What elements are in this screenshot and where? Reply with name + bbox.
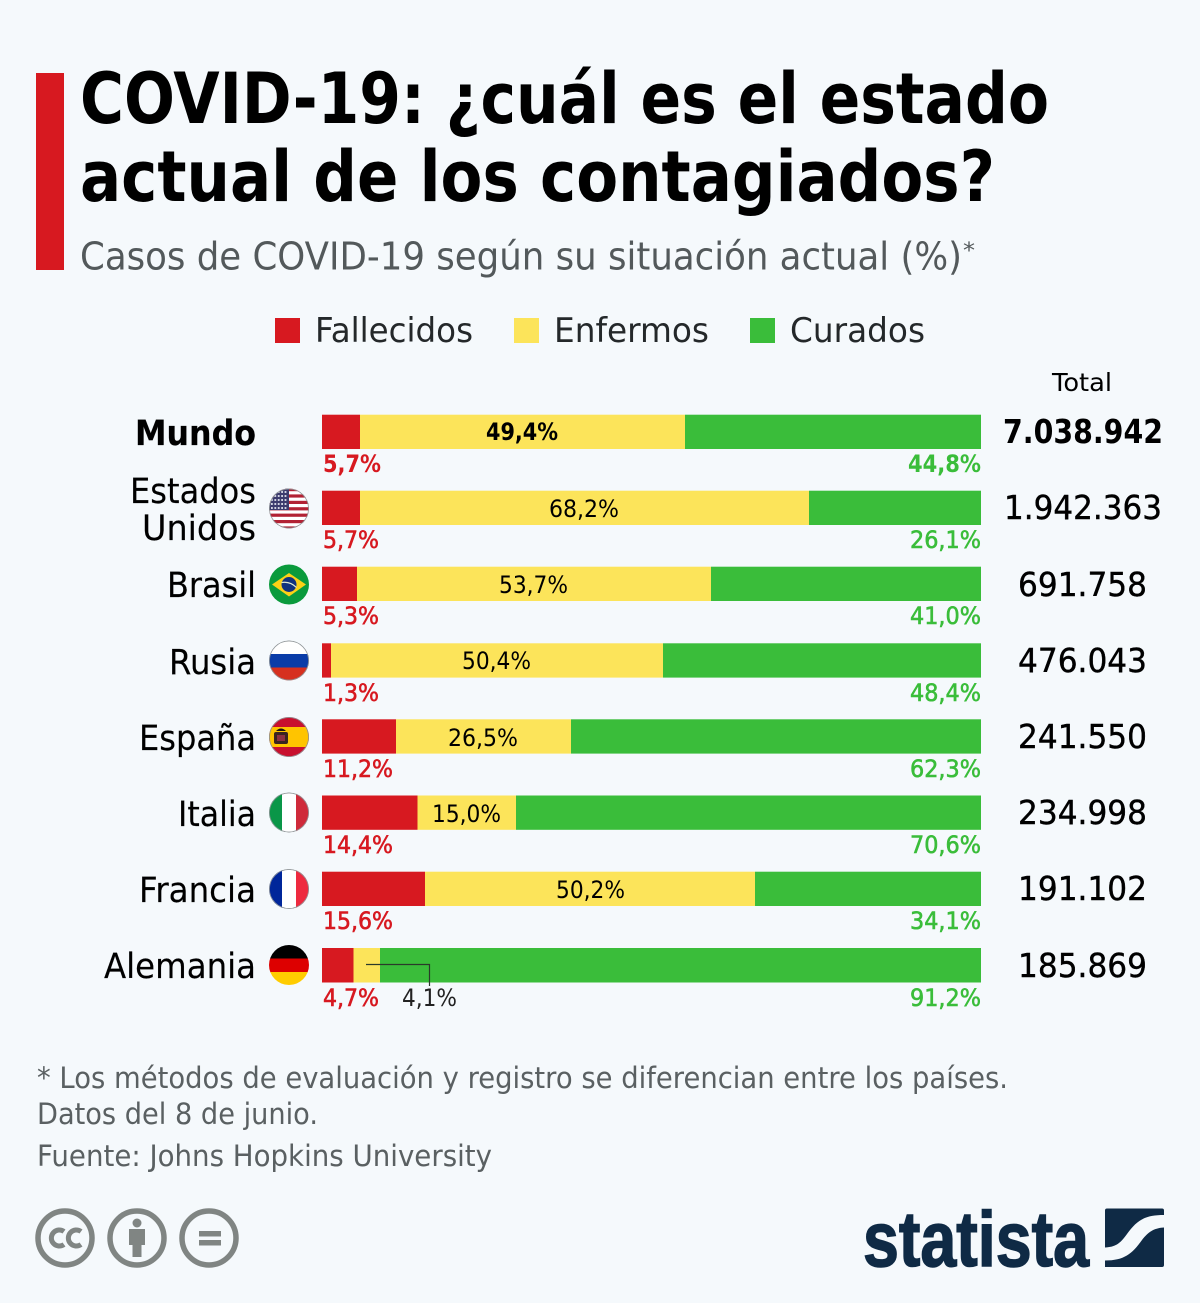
subtitle: *	[963, 239, 975, 264]
row: Brasil: 41,0%	[910, 602, 981, 630]
row: Alemania: 4,7%	[323, 984, 379, 1012]
row: Italia: 14,4%	[323, 831, 393, 859]
row: Estados Unidos: 1.942.363	[1004, 488, 1162, 527]
row: Italia: 15,0%	[432, 800, 501, 828]
row: Francia: 15,6%	[323, 907, 393, 935]
row: Estados Unidos: Estados	[130, 472, 256, 512]
leader line	[366, 964, 430, 986]
title: COVID-19: ¿cuál es el estado	[80, 58, 1049, 140]
row: Rusia: Rusia	[169, 643, 256, 683]
row: Italia: Italia	[178, 795, 256, 835]
icon: Italy flag	[269, 792, 310, 833]
row: España: 11,2%	[323, 755, 393, 783]
icon: Spain flag	[269, 716, 309, 758]
legend: Fallecidos	[315, 311, 473, 350]
row: Brasil: 5,3%	[323, 602, 379, 630]
row: Mundo	[135, 412, 1163, 478]
row: España: 26,5%	[448, 724, 518, 752]
row: Brasil: 53,7%	[499, 571, 568, 599]
row: Alemania: Alemania	[104, 947, 256, 987]
row: Alemania: 91,2%	[910, 984, 981, 1012]
row: Italia	[178, 792, 1147, 859]
row: España: España	[139, 719, 256, 759]
row: Brasil	[167, 564, 1147, 630]
footnote	[37, 1061, 1008, 1173]
icon: Germany flag	[269, 945, 309, 986]
title	[80, 58, 1049, 218]
row: Estados Unidos: Unidos	[142, 509, 256, 549]
row: Rusia	[169, 640, 1147, 707]
legend	[275, 311, 925, 350]
row: España: 62,3%	[910, 755, 981, 783]
icon: creative commons licence	[38, 1211, 236, 1265]
row: Alemania	[104, 945, 1147, 1012]
row: Mundo: 49,4%	[486, 418, 558, 446]
row: Rusia: 50,4%	[462, 647, 531, 675]
footnote: Datos del 8 de junio.	[37, 1097, 318, 1131]
footnote: Fuente: Johns Hopkins University	[37, 1139, 492, 1173]
legend: Enfermos	[554, 311, 709, 350]
row: Rusia: 48,4%	[910, 679, 981, 707]
row: Alemania: 4,1%	[402, 984, 457, 1012]
row: Alemania: 185.869	[1018, 946, 1147, 985]
row: Francia: 50,2%	[556, 876, 625, 904]
row: Mundo: 7.038.942	[1003, 412, 1163, 451]
row: Rusia: 476.043	[1018, 641, 1147, 680]
row: España: 241.550	[1018, 717, 1147, 756]
subtitle: Casos de COVID-19 según su situación actual (%)	[80, 234, 962, 280]
row: Francia	[139, 868, 1147, 935]
icon: US flag	[269, 488, 309, 530]
row: Estados Unidos: 68,2%	[549, 495, 619, 523]
total column heading: Total	[1051, 368, 1112, 397]
footnote: * Los métodos de evaluación y registro se diferencian entre los países.	[37, 1061, 1008, 1095]
title: actual de los contagiados?	[80, 136, 995, 218]
row: Estados Unidos: 26,1%	[910, 526, 981, 554]
row: Estados Unidos: 5,7%	[323, 526, 379, 554]
icon: France flag	[269, 868, 310, 910]
row: Mundo: 5,7%	[323, 450, 381, 478]
title accent bar	[36, 73, 64, 270]
row: Francia: 191.102	[1018, 869, 1147, 908]
row: Brasil: Brasil	[167, 566, 256, 606]
row: Mundo: Mundo	[135, 414, 256, 454]
row: Francia: Francia	[139, 871, 256, 911]
row: Italia: 234.998	[1018, 793, 1147, 832]
statista logo: statista	[863, 1195, 1090, 1283]
row: Estados Unidos	[130, 472, 1162, 554]
row: Rusia: 1,3%	[323, 679, 379, 707]
icon: Brazil flag	[269, 564, 309, 605]
row: España	[139, 716, 1147, 783]
icon: Russia flag	[269, 640, 309, 682]
row: Italia: 70,6%	[910, 831, 981, 859]
row: Brasil: 691.758	[1018, 565, 1147, 604]
row: Francia: 34,1%	[910, 907, 981, 935]
row: Mundo: 44,8%	[908, 450, 981, 478]
legend: Curados	[790, 311, 925, 350]
